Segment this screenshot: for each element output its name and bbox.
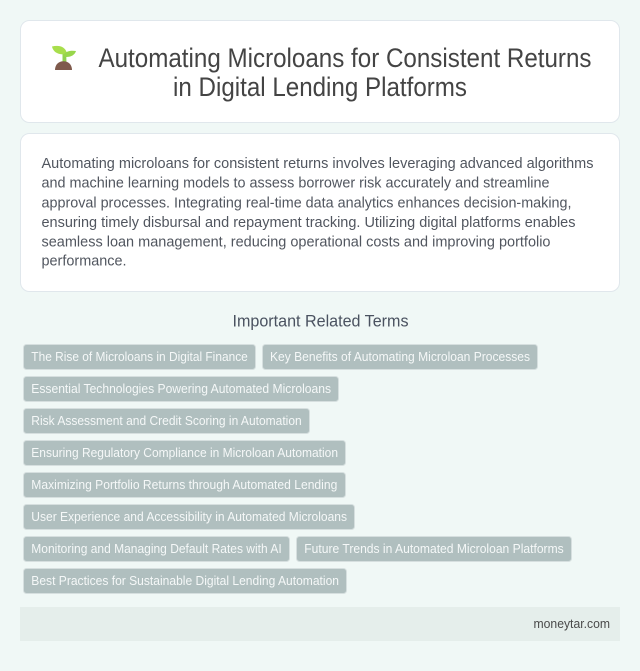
- tag 4: Risk Assessment and Credit Scoring in Automation: [31, 413, 302, 428]
- panel: description: approval processes. Integrating real-time data analytics enhances decision-making,: [42, 194, 572, 212]
- tag 8: Monitoring and Managing Default Rates with AI: [31, 541, 282, 556]
- tag list: [24, 344, 572, 594]
- panel: description: [20, 134, 620, 292]
- tag 7: [24, 504, 354, 530]
- panel: description: seamless loan management, reducing operational costs and improving portfolio: [42, 234, 550, 250]
- footer: [20, 607, 620, 641]
- title: in Digital Lending Platforms: [173, 72, 467, 102]
- icon: sprout: [52, 46, 76, 70]
- tag 10: Best Practices for Sustainable Digital Lending Automation: [31, 573, 339, 588]
- tag 3: [24, 376, 338, 402]
- tag 7: User Experience and Accessibility in Automated Microloans: [31, 509, 347, 524]
- panel: description: performance.: [42, 252, 126, 270]
- tag 3: Essential Technologies Powering Automated Microloans: [31, 381, 331, 396]
- tag 2: Key Benefits of Automating Microloan Processes: [270, 349, 530, 364]
- tag 1: The Rise of Microloans in Digital Finance: [31, 349, 248, 364]
- panel: description: Automating microloans for consistent returns involves leveraging advanced algorithms: [42, 155, 594, 172]
- panel: title card: [20, 20, 620, 122]
- panel: description: and machine learning models to assess borrower risk accurately and streamline: [42, 174, 550, 192]
- tag 9: Future Trends in Automated Microloan Platforms: [304, 541, 564, 556]
- tag 8: [24, 536, 290, 562]
- tag 2: [262, 344, 538, 370]
- heading: important related terms: Important Related Terms: [232, 312, 408, 330]
- tag 5: Ensuring Regulatory Compliance in Microloan Automation: [31, 445, 338, 460]
- tag 6: Maximizing Portfolio Returns through Automated Lending: [31, 477, 337, 492]
- footer: moneytar.com: [534, 616, 610, 631]
- tag 9: [296, 536, 572, 562]
- tag 1: [24, 344, 256, 370]
- tag 10: [24, 568, 346, 594]
- tag 4: [24, 408, 310, 434]
- title: [98, 43, 592, 102]
- tag 5: [24, 440, 346, 466]
- panel: description: ensuring timely disbursal and repayment tracking. Utilizing digital platforms enables: [42, 214, 576, 231]
- tag 6: [24, 472, 346, 498]
- title: Automating Microloans for Consistent Returns: [98, 43, 592, 73]
